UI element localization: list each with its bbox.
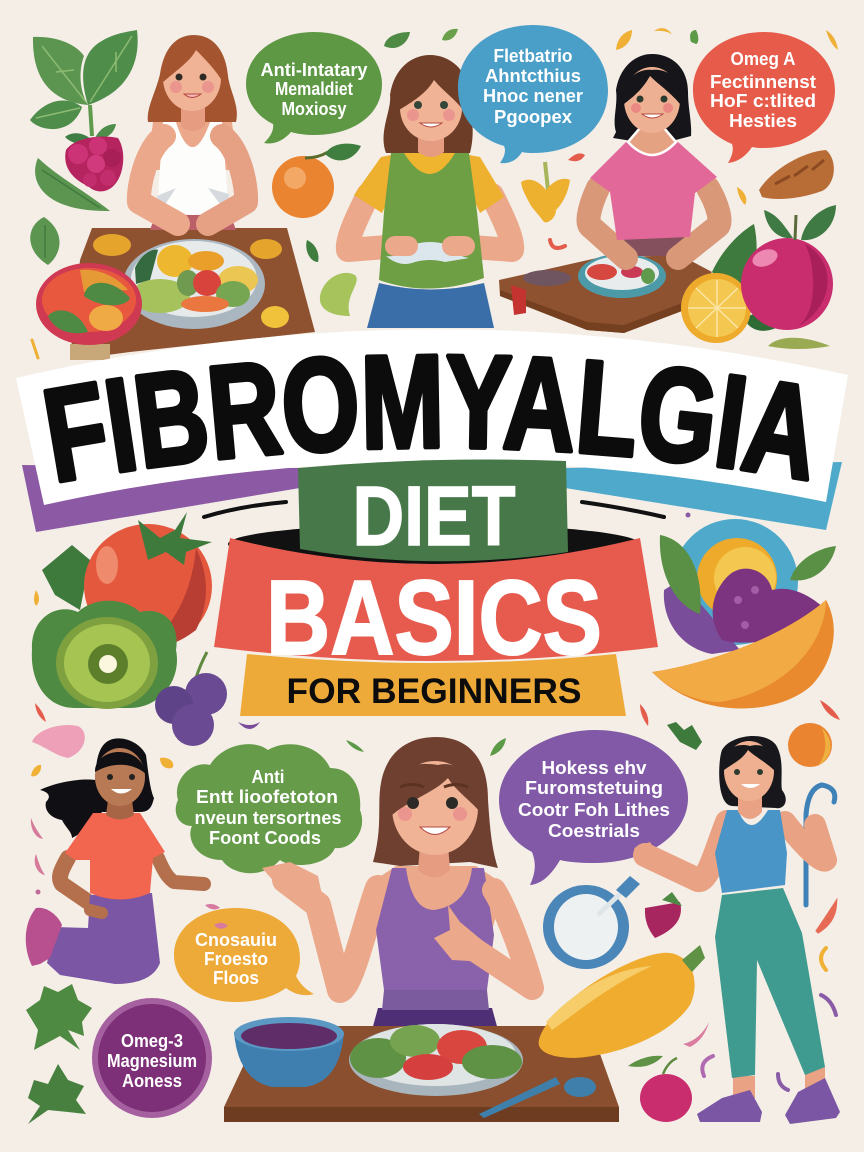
icon: top-left leaves bbox=[30, 30, 138, 144]
title ribbon: purple tail bbox=[22, 465, 300, 532]
speech bubble: green cloud: Entt lioofetoton bbox=[196, 787, 338, 807]
speech bubble: green cloud bbox=[176, 744, 362, 873]
speech bubble: green anti-inflammatory: Memaldiet bbox=[275, 79, 353, 99]
speech bubble: orange: Froesto bbox=[204, 949, 268, 969]
table: wooden table with bowl and plate bbox=[224, 1024, 619, 1122]
badge: purple circle Omega-3: Aoness bbox=[122, 1071, 182, 1091]
figure: woman in pink shirt bbox=[588, 54, 720, 258]
figure: standing woman in blue tank bbox=[634, 736, 840, 1124]
icon: raspberry bbox=[65, 136, 123, 191]
speech bubble: blue: Ahntcthius bbox=[485, 66, 581, 86]
icon: blue berry bowl bbox=[234, 1017, 344, 1087]
decorative icon: scattered leaves bbox=[306, 28, 838, 316]
banner: FOR BEGINNERS yellow bbox=[240, 654, 626, 716]
badge: purple circle Omega-3: Omeg-3 bbox=[121, 1031, 183, 1051]
icon: bread bbox=[759, 150, 834, 199]
speech bubble: purple: Hokess ehv bbox=[542, 758, 646, 778]
icon: cilantro leaves bbox=[26, 984, 92, 1124]
speech bubble: orange bbox=[174, 908, 314, 1002]
banner: DIET green bbox=[298, 460, 568, 563]
speech bubble: purple: Furomstetuing bbox=[525, 778, 663, 798]
icon: mango slice bbox=[652, 600, 834, 709]
figure: woman in white tank bbox=[139, 35, 246, 230]
title ribbon: blue tail bbox=[565, 462, 842, 530]
figure: woman in green vest bbox=[348, 55, 512, 328]
banner: DIET green: DIET bbox=[352, 469, 516, 563]
icon: small raspberry bbox=[645, 892, 682, 938]
speech bubble: purple bbox=[499, 730, 688, 885]
speech bubble: green cloud: Foont Coods bbox=[209, 828, 321, 848]
speech bubble: blue: Pgoopex bbox=[494, 107, 572, 127]
speech bubble: green cloud: Anti bbox=[252, 767, 284, 787]
icon: bowl with fruit bbox=[660, 519, 836, 654]
decorative icon: middle accents bbox=[31, 590, 840, 894]
icon: yellow squash bbox=[539, 945, 705, 1058]
speech bubble: orange: Floos bbox=[213, 968, 259, 988]
icon: kiwi with lettuce bbox=[32, 601, 177, 709]
speech bubble: green cloud: nveun tersortnes bbox=[194, 808, 342, 828]
icon: dashes beside Diet bbox=[204, 502, 690, 518]
icon: orange fruit bbox=[272, 144, 361, 218]
icon: yellow flower bbox=[521, 162, 570, 222]
speech bubble: red bbox=[693, 32, 835, 163]
speech bubble: red: HoF c:tlited bbox=[710, 91, 816, 111]
speech bubble: orange: Cnosauiu bbox=[195, 930, 277, 950]
speech bubble: purple: Cootr Foh Lithes bbox=[518, 800, 670, 820]
icon: grapes bbox=[155, 652, 227, 746]
table: wooden table with salad plate bbox=[70, 228, 315, 360]
icon: white dish with spoon bbox=[543, 876, 640, 969]
badge: purple circle Omega-3: Magnesium bbox=[107, 1051, 197, 1071]
icon: pink apple bbox=[741, 205, 836, 330]
speech bubble: blue bbox=[458, 25, 608, 163]
speech bubble: blue: Fletbatrio bbox=[494, 46, 572, 66]
speech bubble: green anti-inflammatory: Moxiosy bbox=[282, 99, 346, 119]
decorative icon: lower accents bbox=[205, 904, 836, 1090]
speech bubble: red: Fectinnenst bbox=[710, 72, 816, 92]
banner: FOR BEGINNERS yellow: FOR BEGINNERS bbox=[286, 672, 582, 711]
icon: side leaves bbox=[30, 158, 110, 265]
figure: central woman in purple tank bbox=[262, 737, 532, 1030]
icon: red bowl of vegetables bbox=[36, 263, 142, 345]
decorative icon: small accents upper bbox=[32, 338, 830, 358]
speech bubble: green anti-inflammatory bbox=[246, 32, 382, 143]
table: cutting board with plate bbox=[499, 254, 712, 333]
icon: tomato bbox=[42, 512, 212, 648]
figure: kneeling woman in coral shirt bbox=[26, 738, 204, 984]
speech bubble: red: Omeg A bbox=[730, 49, 796, 69]
icon: orange slice and leaves bbox=[681, 224, 776, 343]
banner: black shadow behind red band bbox=[228, 524, 640, 564]
banner: BASICS red: BASICS bbox=[266, 559, 602, 677]
speech bubble: purple: Coestrials bbox=[548, 821, 640, 841]
icon: small apple and leaf bbox=[628, 1056, 692, 1122]
title banner: FIBROMYALGIA: FIBROMYALGIA bbox=[43, 353, 810, 484]
speech bubble: green anti-inflammatory: Anti-Intatary bbox=[260, 60, 368, 80]
speech bubble: red: Hesties bbox=[729, 111, 797, 131]
speech bubble: blue: Hnoc nener bbox=[483, 86, 583, 106]
badge: purple circle Omega-3 bbox=[92, 998, 212, 1118]
